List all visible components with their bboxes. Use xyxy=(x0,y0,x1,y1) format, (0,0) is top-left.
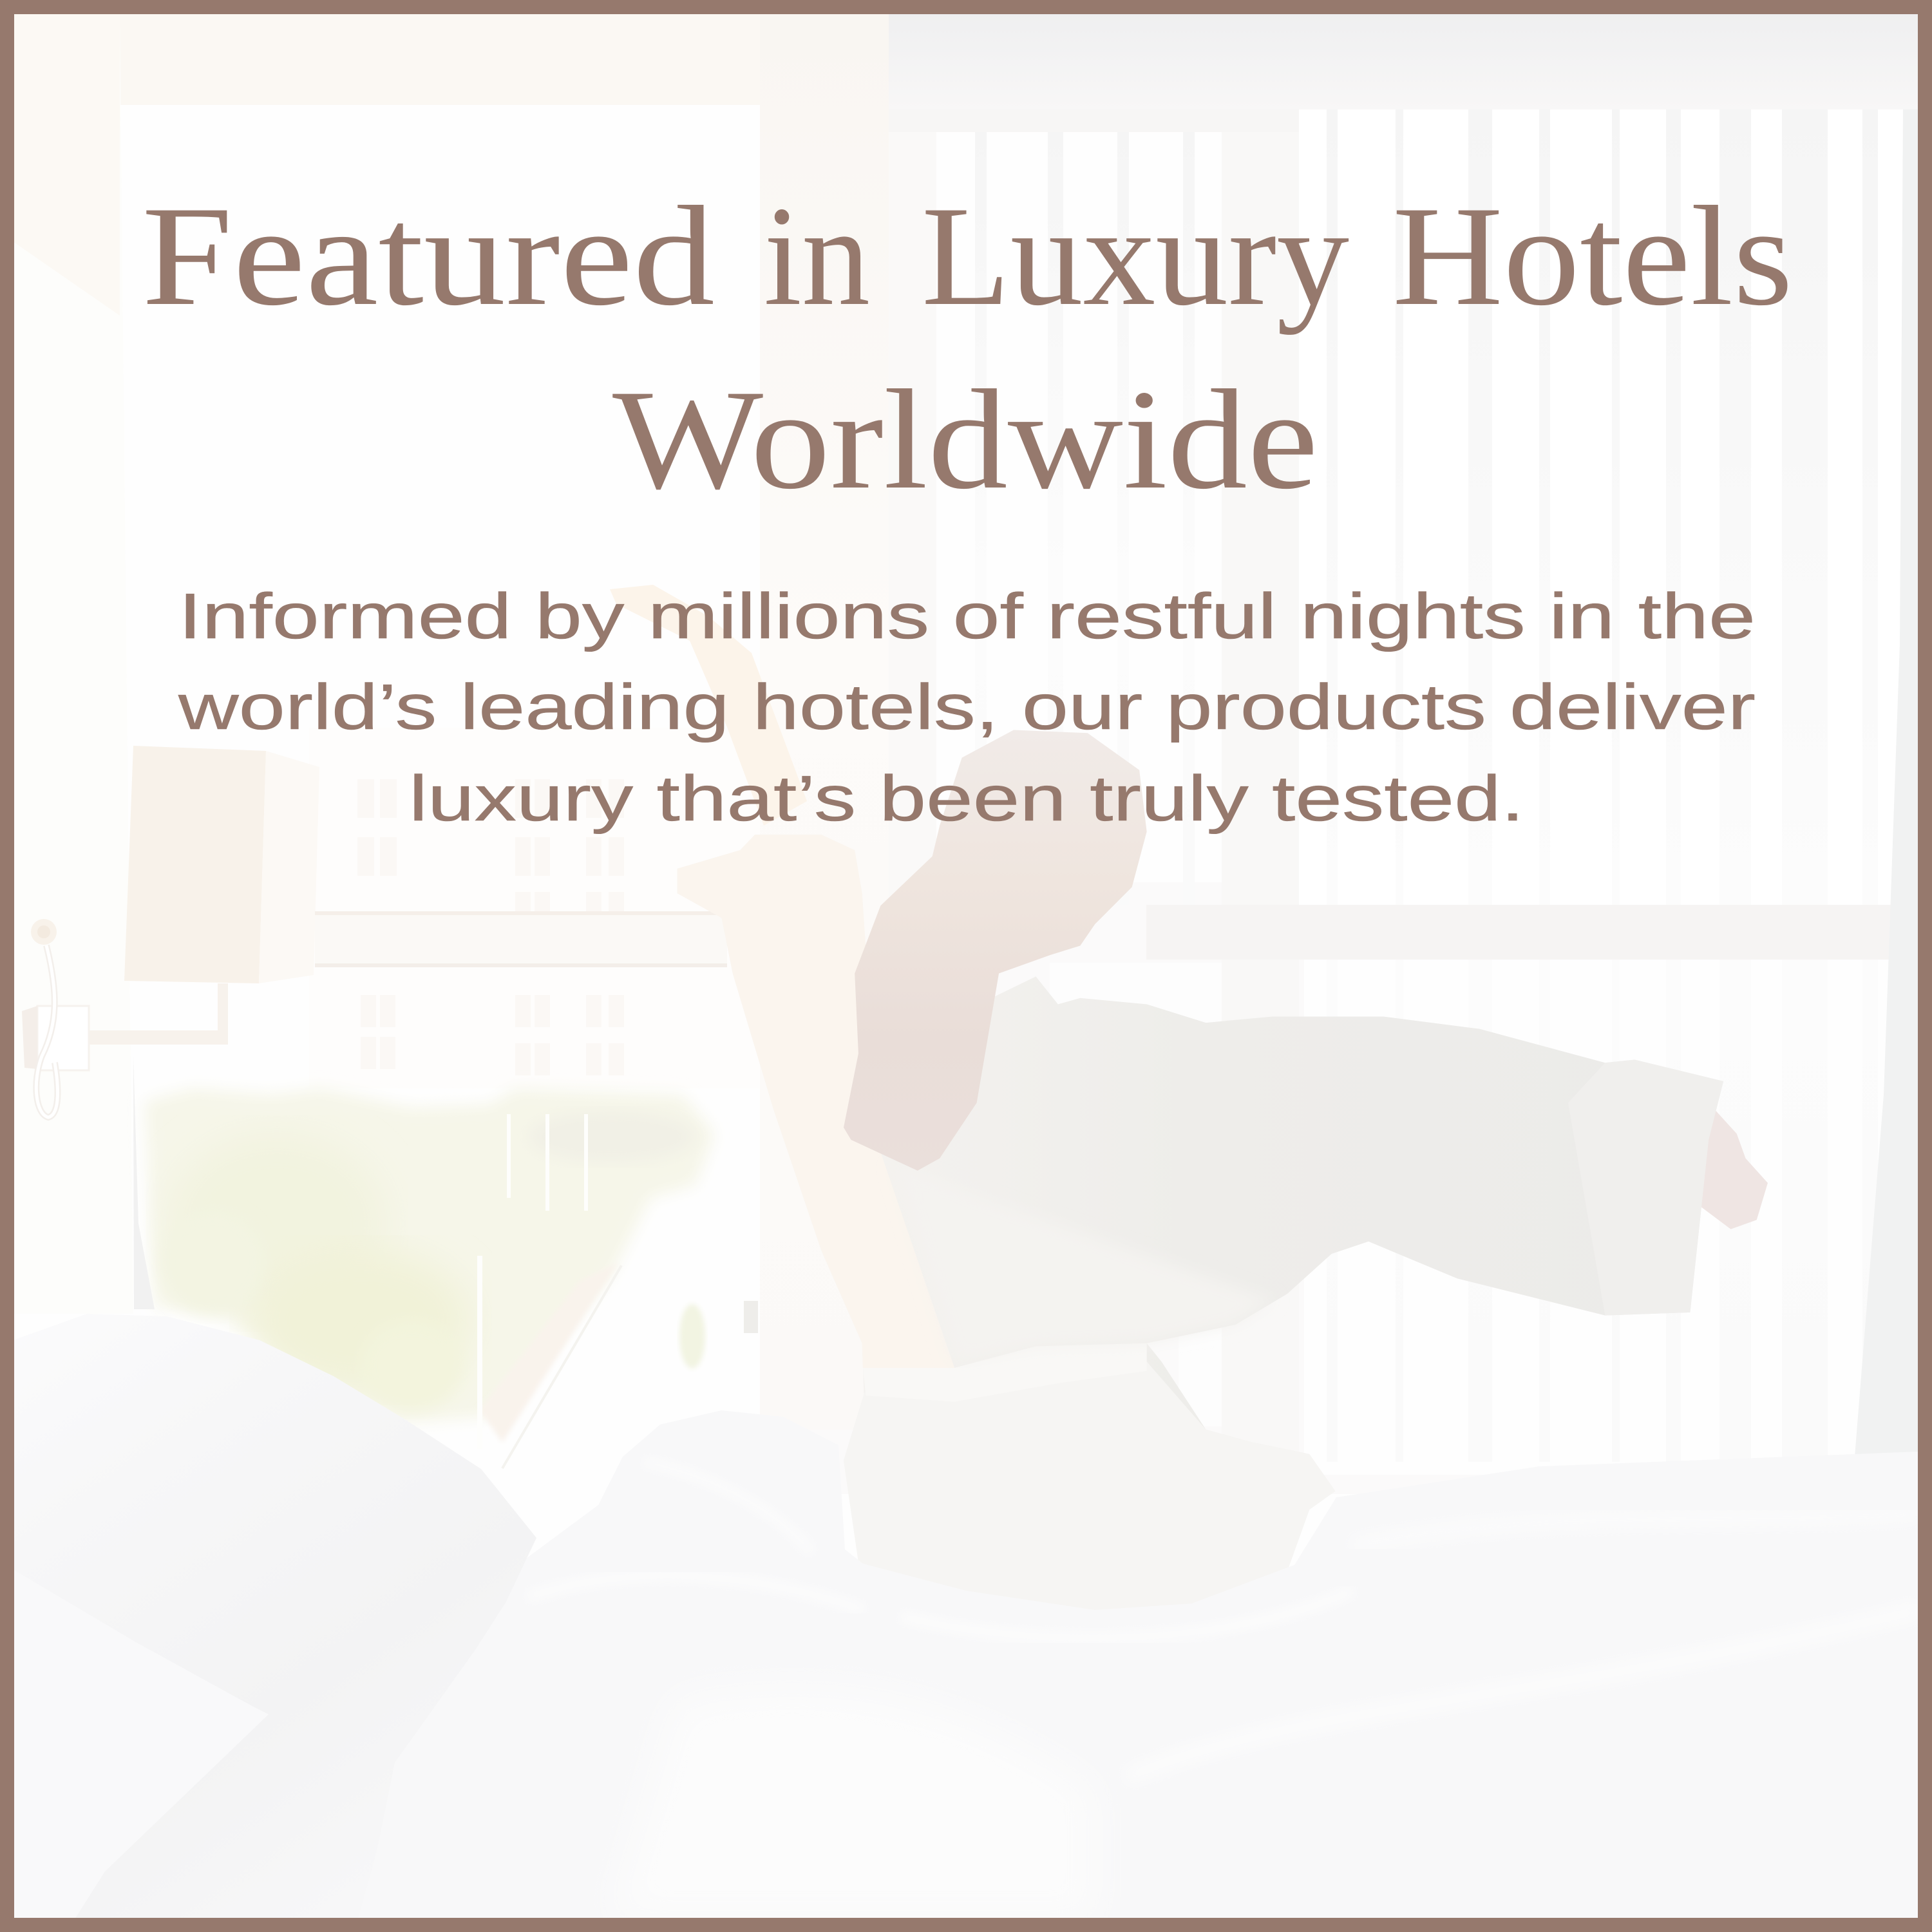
lamp switch and cord xyxy=(31,919,57,1117)
window transom band xyxy=(1146,905,1906,960)
window view: street and fence xyxy=(480,1114,758,1468)
window view: distant buildings xyxy=(309,728,760,1088)
body text: Informed by millions of restful nights in the xyxy=(178,580,1756,652)
front pillow xyxy=(13,1569,269,1919)
robe: lower body xyxy=(844,1361,1335,1615)
raised forearm and hand xyxy=(610,585,807,826)
woman in bathrobe xyxy=(610,585,1768,1615)
back pillow xyxy=(13,1314,536,1919)
robe: back shading xyxy=(895,1164,1273,1361)
robe: sleeve cuff xyxy=(1568,1059,1723,1316)
title: in xyxy=(764,177,870,336)
robe: raised sleeve and side xyxy=(677,835,954,1368)
right dark curtain xyxy=(1855,109,1919,1462)
title: Worldwide xyxy=(612,361,1318,519)
hair and head xyxy=(844,730,1147,1171)
left wall xyxy=(13,13,133,1314)
body text xyxy=(178,580,1756,835)
title xyxy=(142,177,1793,519)
lamp arm xyxy=(22,983,228,1070)
bathrobe xyxy=(677,730,1723,1615)
robe: belt xyxy=(863,1343,1147,1402)
title: Hotels xyxy=(1392,177,1793,336)
outstretched hand xyxy=(1688,1103,1768,1229)
bedding xyxy=(13,1314,1919,1919)
ceiling and upper wall xyxy=(120,13,760,105)
wall lamp xyxy=(22,746,319,1117)
body text: luxury that’s been truly tested. xyxy=(409,762,1524,835)
curtains and right-hand windows xyxy=(760,13,1919,1494)
window sill bar xyxy=(315,911,727,967)
window view: trees xyxy=(145,1088,715,1423)
lamp shade xyxy=(124,746,319,983)
curtain edge by the wall xyxy=(133,1056,155,1309)
duvet xyxy=(322,1410,1919,1919)
title: Featured xyxy=(142,177,715,336)
title: Luxury xyxy=(922,177,1349,336)
body text: world’s leading hotels, our products deliver xyxy=(178,671,1756,743)
